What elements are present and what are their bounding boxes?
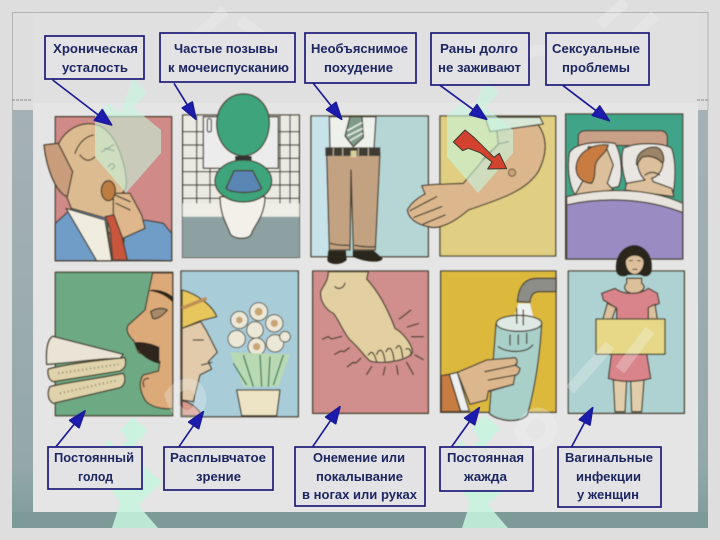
- seat: [215, 160, 272, 202]
- tap: [517, 278, 556, 302]
- blanket: [567, 191, 683, 213]
- foot: [321, 272, 413, 362]
- label: thirst: жажда: [463, 469, 508, 484]
- moustache: [134, 342, 159, 364]
- label: thirst: [440, 447, 533, 491]
- label: frequent urination: к мочеиспусканию: [168, 60, 289, 75]
- floor: [183, 217, 299, 257]
- arrow: healing: [440, 85, 487, 119]
- panel: vaginal infections illustration: [568, 271, 684, 413]
- hand: [457, 358, 520, 404]
- arrow: fatigue: [53, 80, 112, 125]
- trousers: [327, 153, 380, 250]
- label: numbness: Онемение или: [313, 450, 405, 465]
- label: weight loss: [305, 33, 416, 83]
- arrow: vision: [179, 412, 203, 447]
- woman: [575, 147, 613, 195]
- label: numbness: в ногах или руках: [302, 487, 418, 502]
- label: hunger: [48, 447, 142, 489]
- arrow: weight loss: [313, 83, 342, 119]
- panel: constant thirst illustration: [441, 271, 556, 420]
- rolled sleeve: [485, 117, 543, 132]
- panel: constant hunger illustration: [46, 272, 173, 416]
- label: slow healing: Раны долго: [440, 41, 518, 56]
- face: [127, 273, 173, 409]
- label: weight loss: Необъяснимое: [311, 41, 408, 56]
- label: weight loss: похудение: [324, 60, 393, 75]
- label: sexual problems: Сексуальные: [552, 41, 640, 56]
- label: slow healing: [431, 33, 529, 85]
- panel: numbness in limbs illustration: [313, 271, 428, 413]
- label: infections: [558, 447, 661, 507]
- label: infections: у женщин: [577, 487, 639, 502]
- hair: [182, 290, 217, 328]
- red arrow on the arm: [453, 130, 507, 169]
- panel: unexplained weight loss illustration: [311, 116, 428, 264]
- shirt: [329, 117, 376, 148]
- panel: chronic fatigue illustration: [44, 117, 172, 261]
- label: chronic fatigue: Хроническая: [53, 41, 138, 56]
- woman head over panels: [616, 245, 652, 277]
- label: blurred vision: Расплывчатое: [170, 450, 266, 465]
- girl face: [182, 322, 217, 402]
- flowers: [228, 303, 290, 355]
- label: blurred vision: зрение: [196, 469, 241, 484]
- tingling marks: [323, 310, 423, 375]
- label: chronic fatigue: усталость: [62, 60, 128, 75]
- label: blurred vision: [164, 447, 273, 490]
- panel: blurred vision illustration: [181, 271, 298, 417]
- arrow: infections: [572, 408, 593, 447]
- legs: [613, 380, 644, 412]
- vase: [237, 390, 280, 416]
- arrow: urination: [174, 83, 196, 119]
- necklace and neck: [625, 278, 644, 293]
- label: chronic fatigue: [45, 36, 144, 79]
- label: hunger: голод: [78, 469, 114, 484]
- label: hunger: Постоянный: [54, 450, 134, 465]
- label: sexual problems: [546, 33, 649, 85]
- label: frequent urination: [160, 33, 295, 82]
- lower watermark shapes: [95, 415, 512, 528]
- wound: [508, 169, 516, 176]
- panel: slow wound healing illustration: [407, 116, 556, 256]
- belt: [325, 147, 380, 156]
- hand with cookie: [113, 193, 145, 238]
- label: numbness: покалывание: [316, 469, 403, 484]
- label: numbness: [295, 447, 425, 506]
- sleeve: [441, 374, 461, 412]
- shoes: [327, 251, 383, 264]
- label: infections: Вагинальные: [565, 450, 653, 465]
- arrow: numbness: [313, 407, 340, 447]
- watermark shapes: [95, 78, 513, 193]
- head: [55, 124, 140, 233]
- dress: [182, 401, 202, 416]
- label: slow healing: не заживают: [438, 60, 521, 75]
- tie: [345, 117, 363, 147]
- label: sexual problems: проблемы: [562, 60, 630, 75]
- bowl: [220, 197, 265, 238]
- panel: sexual problems illustration: [566, 114, 683, 259]
- shirt: [66, 208, 112, 261]
- faint white watermark letters: [170, 2, 655, 445]
- headboard: [578, 131, 667, 146]
- lid: [217, 94, 269, 156]
- label: thirst: Постоянная: [447, 450, 524, 465]
- dress: [602, 288, 659, 381]
- pillows: [568, 142, 621, 195]
- arrow: hunger: [56, 411, 85, 447]
- suit: [55, 208, 172, 261]
- label: frequent urination: Частые позывы: [174, 41, 278, 56]
- sign: [596, 319, 665, 354]
- glass: [489, 316, 542, 420]
- panel: toilet illustration: [183, 94, 299, 257]
- water stream: [512, 303, 535, 325]
- tank: [203, 117, 278, 168]
- arm: [407, 125, 545, 227]
- stems: [230, 352, 290, 387]
- arms: [603, 303, 657, 320]
- cake: [46, 336, 123, 364]
- tie: [105, 214, 127, 260]
- man: [625, 151, 674, 197]
- arrow: sexual problems: [563, 85, 609, 121]
- label: infections: инфекции: [576, 469, 641, 484]
- arrow: thirst: [452, 408, 479, 447]
- ear and hair: [44, 143, 73, 197]
